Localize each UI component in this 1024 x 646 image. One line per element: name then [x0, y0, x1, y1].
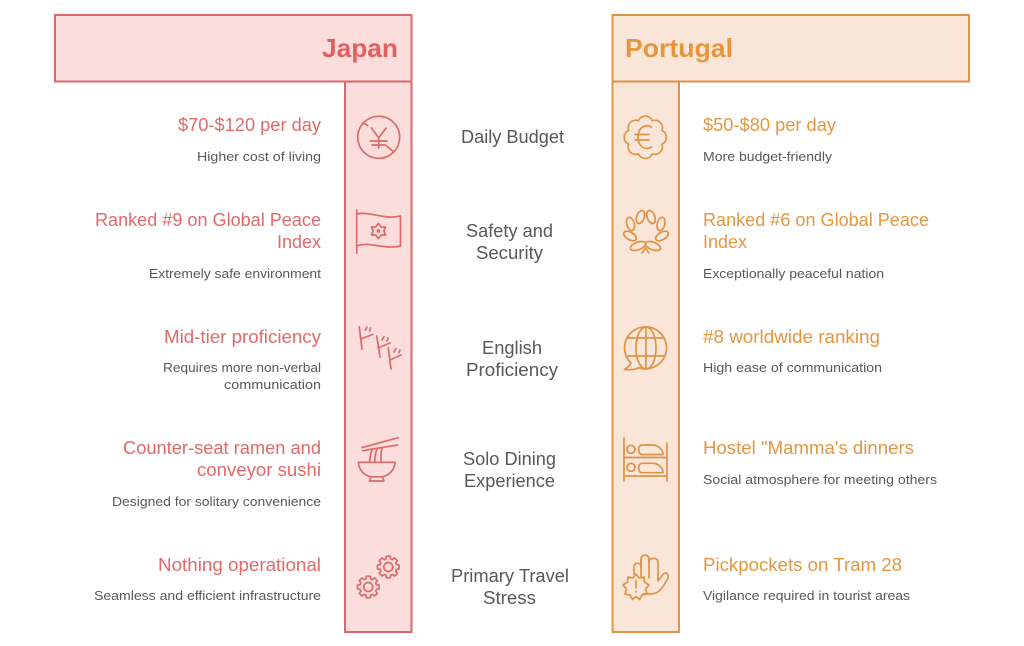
label: Primary Travel Stress: Stress — [483, 588, 536, 608]
row 4 Japan text — [112, 438, 321, 509]
row 3 Portugal text — [703, 327, 882, 375]
row 1 Japan text — [178, 115, 321, 164]
row 4 Portugal text — [703, 438, 938, 487]
row 2 Japan text: Index — [277, 232, 321, 252]
row 3 Japan text: Requires more non-verbal — [163, 360, 321, 375]
row 2 Japan text: Ranked #9 on Global Peace — [95, 210, 321, 230]
row 5 Japan text: Nothing operational — [158, 555, 321, 575]
label: Primary Travel Stress — [451, 566, 569, 608]
row 2 Portugal text: Exceptionally peaceful nation — [703, 266, 884, 281]
row 4 Japan text: conveyor sushi — [197, 460, 321, 480]
label: Solo Dining Experience: Solo Dining — [463, 449, 556, 469]
row 4 Japan text: Counter-seat ramen and — [123, 438, 321, 458]
row 1 Portugal text — [703, 115, 836, 164]
row 2 Portugal text: Index — [703, 232, 747, 252]
heading: Portugal: Portugal — [625, 33, 733, 63]
row 1 Portugal text: More budget-friendly — [703, 149, 833, 164]
row 5 Portugal text — [703, 555, 911, 603]
row 4 Portugal text: Hostel "Mamma's dinners — [703, 438, 914, 458]
label: English Proficiency: English — [482, 338, 542, 358]
row 2 Japan text: Extremely safe environment — [149, 266, 321, 281]
icon: Japan flag — [357, 210, 400, 253]
label: Solo Dining Experience — [463, 449, 556, 491]
row 4 Japan text: Designed for solitary convenience — [112, 494, 321, 509]
row 3 Japan text: Mid-tier proficiency — [164, 327, 321, 347]
row 3 Japan text — [163, 327, 321, 392]
row 3 Japan text: communication — [224, 377, 321, 392]
icon: ramen bowl — [358, 438, 398, 481]
row 5 Portugal text: Pickpockets on Tram 28 — [703, 555, 902, 575]
Japan panel shape — [55, 15, 412, 632]
row 5 Portugal text: Vigilance required in tourist areas — [703, 588, 911, 603]
icon: gears — [357, 556, 399, 598]
icon: globe speech bubble — [624, 327, 667, 370]
row 1 Japan text: Higher cost of living — [197, 149, 321, 164]
label: Daily Budget: Daily Budget — [461, 127, 564, 147]
row 1 Japan text: $70-$120 per day — [178, 115, 321, 135]
label: Primary Travel Stress: Primary Travel — [451, 566, 569, 586]
row 3 Portugal text: #8 worldwide ranking — [703, 327, 880, 347]
row 2 Portugal text — [703, 210, 929, 281]
Japan header divider — [55, 80, 412, 82]
icon: bunk bed — [624, 438, 667, 481]
icon: hand with warning badge — [623, 555, 668, 600]
Portugal header divider — [612, 80, 679, 82]
icon: crossed-out yen — [358, 116, 400, 158]
icon: laurel wreath — [622, 209, 670, 253]
heading: Japan: Japan — [322, 33, 398, 63]
icon: katakana characters — [359, 327, 401, 369]
row 1 Portugal text: $50-$80 per day — [703, 115, 836, 135]
row 2 Japan text — [95, 210, 321, 281]
label: Safety and Security — [466, 221, 553, 263]
label: Solo Dining Experience: Experience — [464, 471, 555, 491]
row 4 Portugal text: Social atmosphere for meeting others — [703, 472, 938, 487]
label: English Proficiency: Proficiency — [466, 360, 558, 380]
row 2 Portugal text: Ranked #6 on Global Peace — [703, 210, 929, 230]
Portugal panel shape — [612, 15, 969, 632]
row 5 Japan text: Seamless and efficient infrastructure — [94, 588, 321, 603]
row 5 Japan text — [94, 555, 321, 603]
label: English Proficiency — [466, 338, 558, 380]
label: Safety and Security: Safety and — [466, 221, 553, 241]
icon: euro cloud — [624, 116, 666, 158]
row 3 Portugal text: High ease of communication — [703, 360, 882, 375]
label: Safety and Security: Security — [476, 243, 543, 263]
